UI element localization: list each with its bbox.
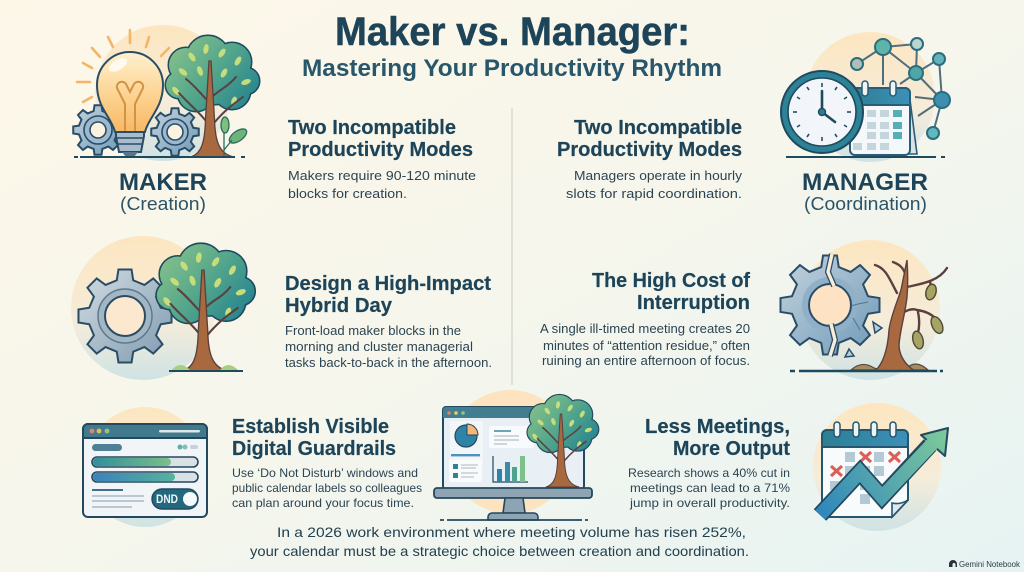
text block: digital guardrails: public calendar labels so colleagues xyxy=(232,481,422,495)
icon: calendar with rising arrow xyxy=(813,403,948,531)
text block: less meetings, more output: Research shows a 40% cut in xyxy=(628,466,790,480)
label: maker xyxy=(119,169,207,214)
text block: design a hybrid day: morning and cluster managerial xyxy=(285,339,473,354)
text block: cost of interruption: minutes of “attention residue,” often xyxy=(543,338,750,353)
text block: maker productivity mode: Two Incompatible xyxy=(288,117,456,139)
text block: design a hybrid day: Design a High-Impact xyxy=(285,273,491,295)
text block: cost of interruption: ruining an entire afternoon of focus. xyxy=(542,353,750,368)
icon: manager clock, calendar and network xyxy=(781,32,950,162)
text block: manager productivity mode xyxy=(557,117,743,201)
text block: manager productivity mode: Two Incompatible xyxy=(574,117,742,139)
text block: design a hybrid day: tasks back-to-back in the afternoon. xyxy=(285,355,492,370)
footer statement: your calendar must be a strategic choice between creation and coordination. xyxy=(250,543,749,559)
icon: monitor dashboard with tree xyxy=(434,390,598,520)
text block: design a hybrid day xyxy=(285,273,492,370)
label: maker: MAKER xyxy=(119,169,207,196)
text block: maker productivity mode: Productivity Modes xyxy=(288,139,473,161)
icon: DND browser window xyxy=(83,407,207,527)
label: manager: (Coordination) xyxy=(804,194,927,214)
text block: digital guardrails: Use ‘Do Not Disturb’ windows and xyxy=(232,466,418,480)
icon: DND browser window: DND xyxy=(156,494,178,506)
icon: broken gear and withered tree xyxy=(780,240,947,380)
text block: less meetings, more output: jump in overall productivity. xyxy=(629,496,790,510)
footer statement: In a 2026 work environment where meeting volume has risen 252%, xyxy=(277,524,746,540)
text block: digital guardrails: Establish Visible xyxy=(232,416,389,438)
text block: manager productivity mode: Productivity Modes xyxy=(557,139,742,161)
text block: less meetings, more output: meetings can lead to a 71% xyxy=(630,481,790,495)
text block: digital guardrails: can plan around your focus time. xyxy=(232,496,414,510)
title: Mastering Your Productivity Rhythm xyxy=(302,55,722,82)
text block: manager productivity mode: Managers operate in hourly xyxy=(574,168,743,183)
text block: less meetings, more output: Less Meetings, xyxy=(645,416,790,438)
text block: cost of interruption xyxy=(540,270,750,368)
title: Maker vs. Manager: xyxy=(335,10,690,54)
icon: gear and tree xyxy=(71,236,254,380)
label: manager xyxy=(802,169,928,214)
text block: manager productivity mode: slots for rapid coordination. xyxy=(566,186,742,201)
label: maker: (Creation) xyxy=(120,194,206,214)
icon: maker lightbulb, gears and tree xyxy=(73,25,259,161)
text block: maker productivity mode xyxy=(288,117,476,201)
label: manager: MANAGER xyxy=(802,169,928,196)
text block: digital guardrails: Digital Guardrails xyxy=(232,438,396,460)
title xyxy=(302,10,722,82)
text block: design a hybrid day: Front-load maker blocks in the xyxy=(285,323,461,338)
text block: maker productivity mode: blocks for creation. xyxy=(288,186,407,201)
text block: digital guardrails xyxy=(232,416,422,510)
text block: design a hybrid day: Hybrid Day xyxy=(285,295,393,317)
text block: less meetings, more output xyxy=(628,416,790,510)
badge: Gemini Notebook: Gemini Notebook xyxy=(959,559,1021,569)
text block: cost of interruption: The High Cost of xyxy=(592,270,750,292)
footer statement xyxy=(250,524,749,559)
text block: maker productivity mode: Makers require 90-120 minute xyxy=(288,168,476,183)
text block: less meetings, more output: More Output xyxy=(673,438,790,460)
text block: cost of interruption: Interruption xyxy=(637,292,750,314)
text block: cost of interruption: A single ill-timed meeting creates 20 xyxy=(540,321,750,336)
